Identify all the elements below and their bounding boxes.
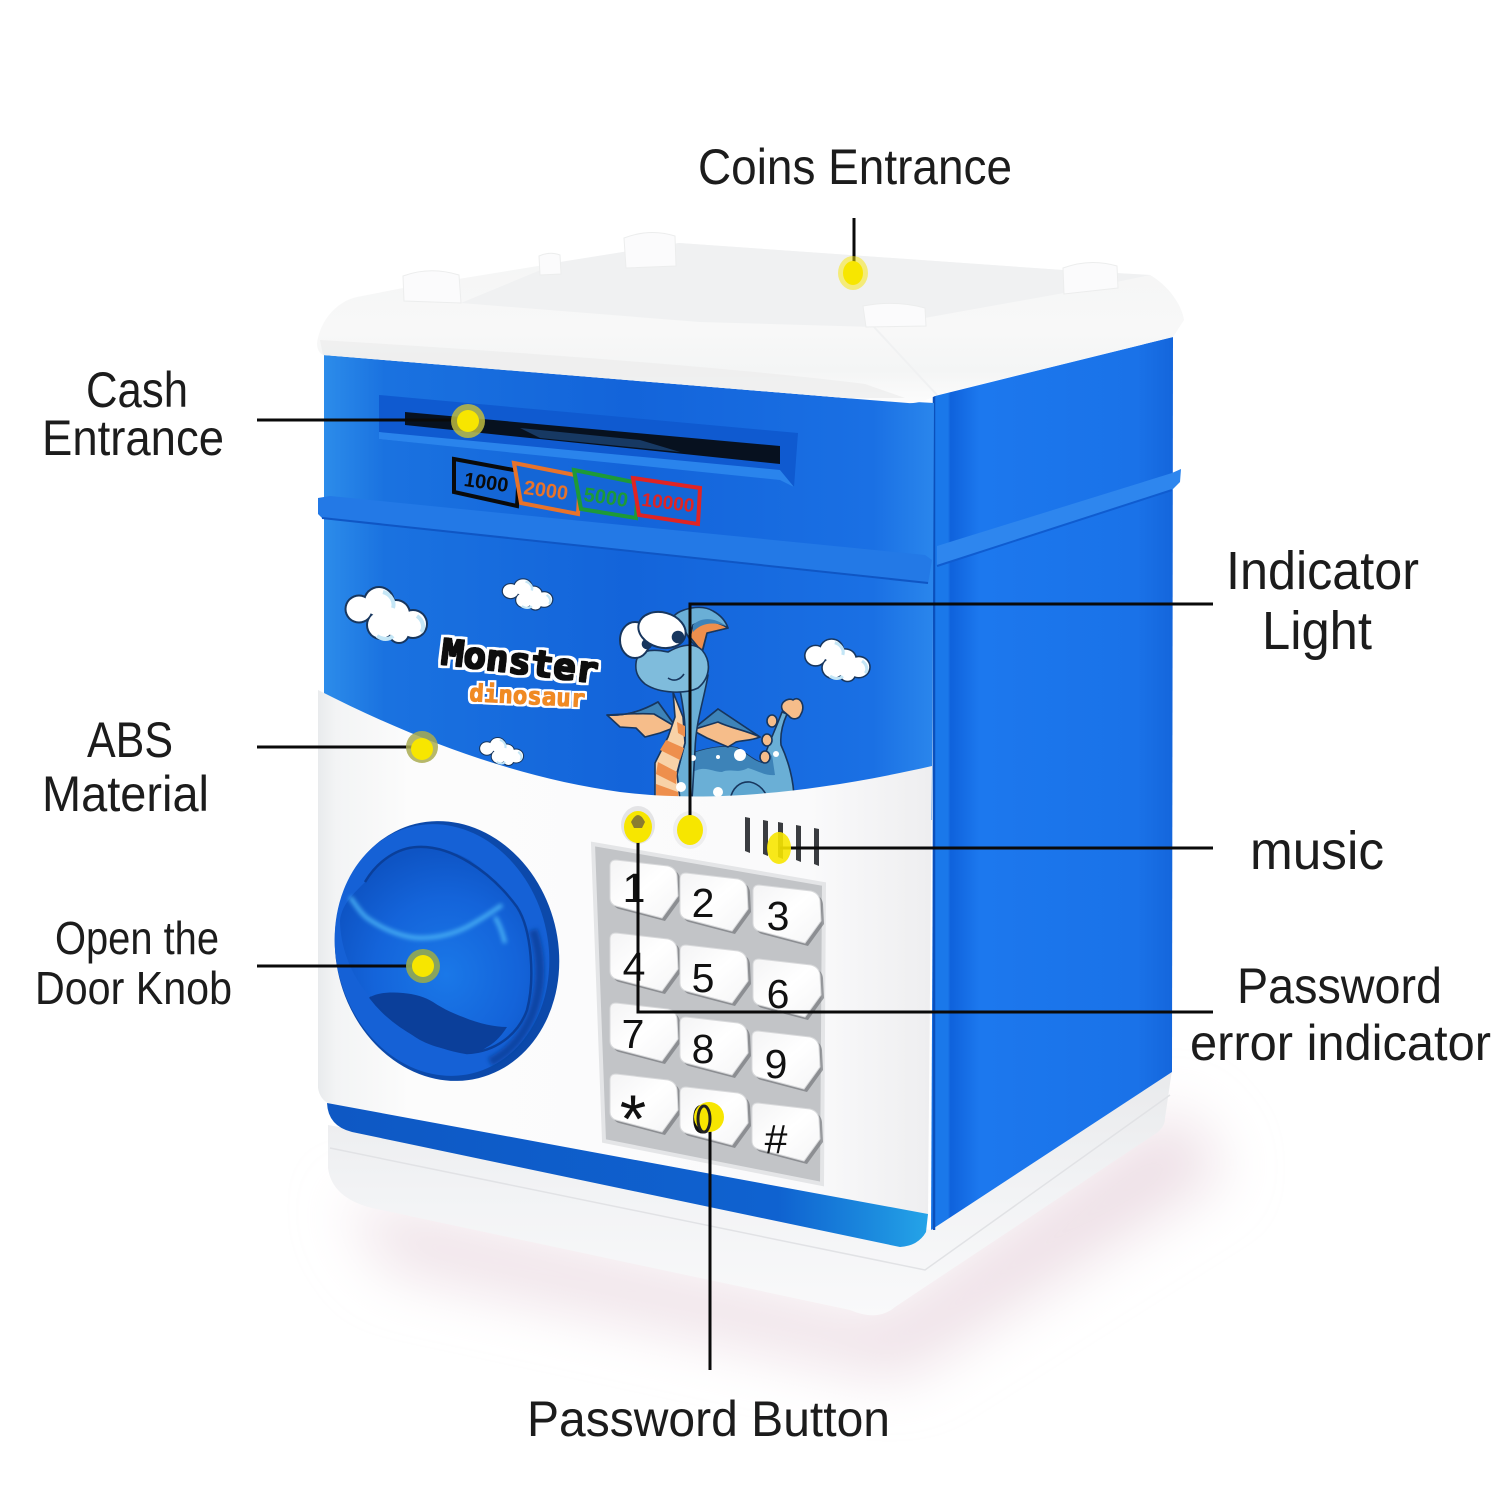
denomination tags <box>454 459 700 524</box>
callout dots <box>406 256 868 1132</box>
tag 5000: 5000 <box>582 484 629 512</box>
tag 2000 <box>514 463 580 514</box>
label: Password Button: Password Button <box>527 1391 890 1447</box>
label: ABS Material: Material <box>42 766 209 822</box>
tag 5000 <box>574 470 638 518</box>
label: ABS Material: ABS <box>87 712 173 768</box>
key labels: 6 <box>767 971 789 1017</box>
tag 1000 <box>454 459 519 506</box>
dinosaur illustration <box>607 607 803 800</box>
cash slot <box>405 412 780 464</box>
front white body <box>318 690 932 1215</box>
callout lines <box>257 218 1213 1370</box>
label: Password error indicator: error indicator <box>1190 1015 1491 1071</box>
logo: Monster dinosaur: dinosaur <box>469 679 586 713</box>
crest <box>673 607 728 653</box>
tag 10000 <box>633 478 700 524</box>
key labels: 0 <box>692 1096 714 1142</box>
label: Indicator Light: Light <box>1262 601 1372 661</box>
label: music: music <box>1250 821 1384 881</box>
label: Open the Door Knob: Door Knob <box>35 962 232 1014</box>
tag 2000: 2000 <box>522 477 569 505</box>
tail and body <box>690 712 794 800</box>
key labels: 3 <box>767 893 789 939</box>
cash slot recess <box>379 395 798 487</box>
front blue panel <box>324 355 934 820</box>
head <box>636 645 708 692</box>
speaker grille <box>745 817 819 866</box>
lid <box>317 243 1184 403</box>
floor shadow <box>345 1110 1225 1375</box>
keys <box>610 860 824 1164</box>
knob <box>308 797 586 1105</box>
key labels <box>620 865 789 1162</box>
label: Password error indicator <box>1190 958 1491 1071</box>
belly stripes <box>655 692 685 800</box>
key labels: 1 <box>623 865 645 911</box>
key labels: 5 <box>692 955 714 1001</box>
indicator sockets <box>621 806 655 844</box>
lid pegs <box>403 232 1118 327</box>
label: Open the Door Knob: Open the <box>55 912 219 964</box>
left wing <box>607 702 676 737</box>
label: Open the Door Knob <box>35 912 232 1014</box>
right wing <box>692 709 760 747</box>
label: Indicator Light <box>1226 541 1419 661</box>
tag 10000: 10000 <box>640 490 695 517</box>
label: Coins Entrance: Coins Entrance <box>698 139 1012 195</box>
piggy bank safe <box>308 232 1184 1315</box>
keypad <box>593 844 824 1184</box>
blue bottom stripe <box>327 1103 928 1247</box>
label: ABS Material <box>42 712 209 822</box>
blue band <box>318 496 932 584</box>
label: Indicator Light: Indicator <box>1226 541 1419 601</box>
eyes <box>620 622 650 658</box>
logo: Monster dinosaur: Monster <box>439 632 601 692</box>
label: Cash Entrance: Cash <box>86 362 188 418</box>
key labels: 9 <box>765 1041 787 1087</box>
label: Cash Entrance: Entrance <box>42 410 224 466</box>
tag 1000: 1000 <box>463 469 510 497</box>
base <box>328 1070 1172 1315</box>
key labels: 2 <box>692 880 714 926</box>
label: Password error indicator: Password <box>1237 958 1442 1014</box>
key labels: 4 <box>623 944 645 990</box>
tail tip and spikes <box>760 699 803 763</box>
clouds <box>344 578 871 766</box>
key labels: * <box>620 1081 646 1157</box>
label: Cash Entrance <box>42 362 224 466</box>
key labels: 8 <box>692 1026 714 1072</box>
key labels: # <box>765 1116 788 1162</box>
side panel <box>931 337 1173 1230</box>
side band <box>937 469 1181 566</box>
neck <box>675 675 708 800</box>
key labels: 7 <box>622 1011 644 1057</box>
white dots <box>676 749 779 797</box>
